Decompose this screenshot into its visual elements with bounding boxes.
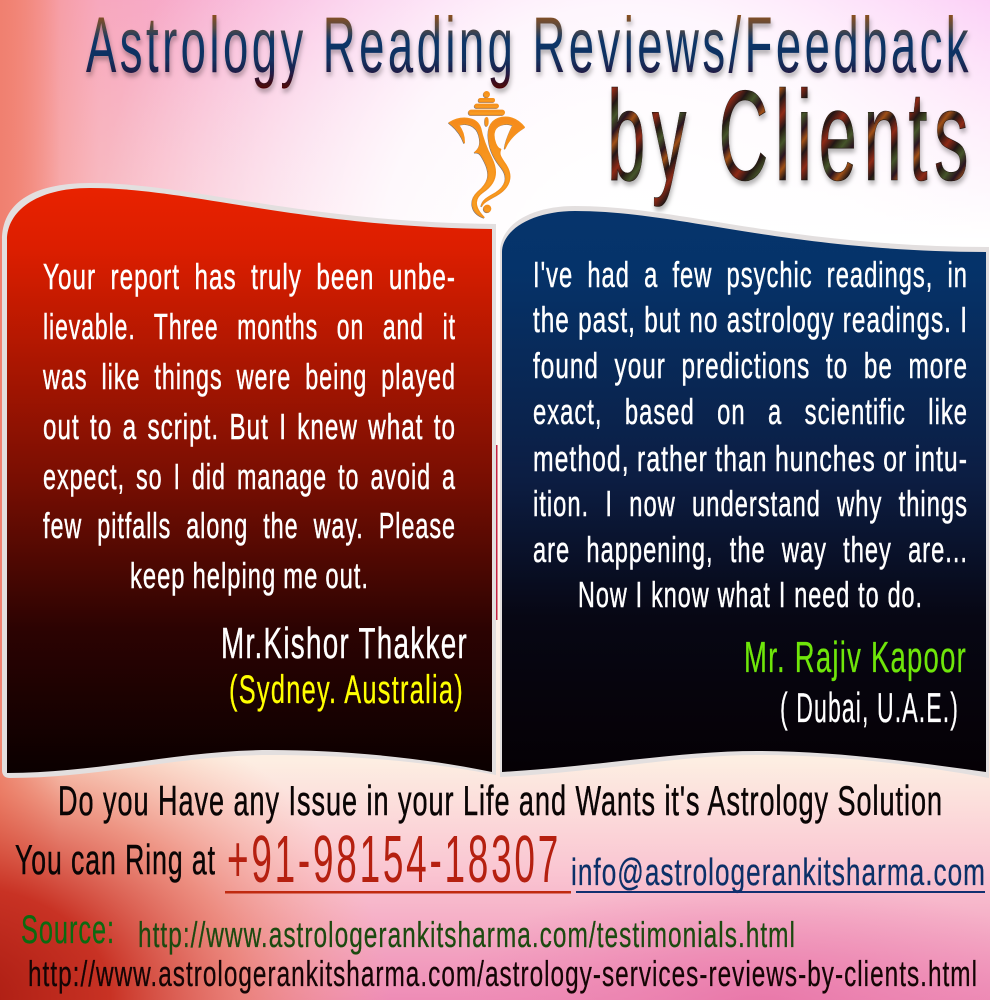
panel: left testimonial — [2, 183, 496, 778]
panel: right testimonial — [500, 206, 989, 778]
left testimonial text: Your report has truly been unbe- — [43, 256, 456, 297]
accent line between panels — [496, 445, 498, 620]
left testimonial text: keep helping me out. — [130, 555, 369, 596]
icon: Ganesha emblem — [449, 92, 524, 217]
left testimonial text — [42, 256, 456, 596]
left testimonial text: was like things were being played — [42, 356, 456, 397]
left client name: Mr.Kishor Thakker — [221, 619, 468, 668]
ring label: You can Ring at — [15, 836, 216, 883]
phone number: +91-98154-18307 — [227, 822, 561, 897]
source label: Source: — [21, 908, 115, 952]
right testimonial text — [533, 254, 968, 615]
left client location: (Sydney. Australia) — [229, 668, 464, 712]
left testimonial text: out to a script. But I knew what to — [43, 406, 456, 447]
left testimonial text: expect, so I did manage to avoid a — [43, 456, 456, 497]
left testimonial text: lievable. Three months on and it — [43, 306, 456, 347]
left testimonial text: few pitfalls along the way. Please — [43, 505, 456, 546]
